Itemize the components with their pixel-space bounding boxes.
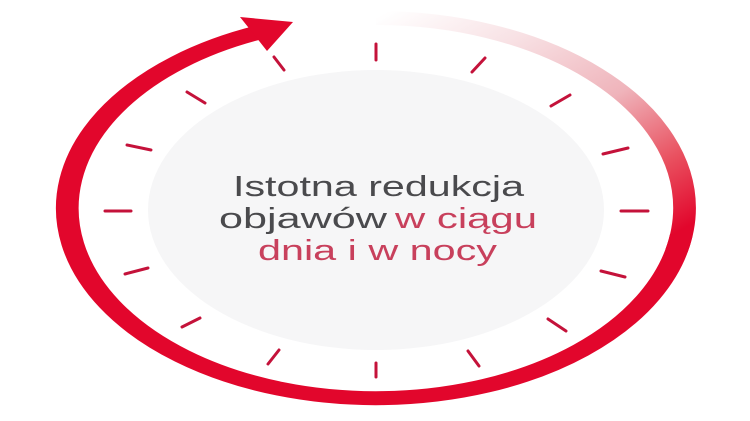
inner grey disc xyxy=(148,70,604,350)
ring: fading arc from top to right xyxy=(376,18,685,251)
heading line 2 red part: w ciągu xyxy=(394,203,537,235)
central text xyxy=(219,171,537,267)
heading line 3: dnia i w nocy xyxy=(258,235,498,267)
icon: arrow head xyxy=(240,17,293,51)
heading line 1: Istotna redukcja xyxy=(233,171,524,203)
ring: solid red arc ending at arrow xyxy=(67,30,681,398)
heading line 2 dark part: objawów xyxy=(219,203,388,235)
clock tick marks xyxy=(105,44,648,377)
